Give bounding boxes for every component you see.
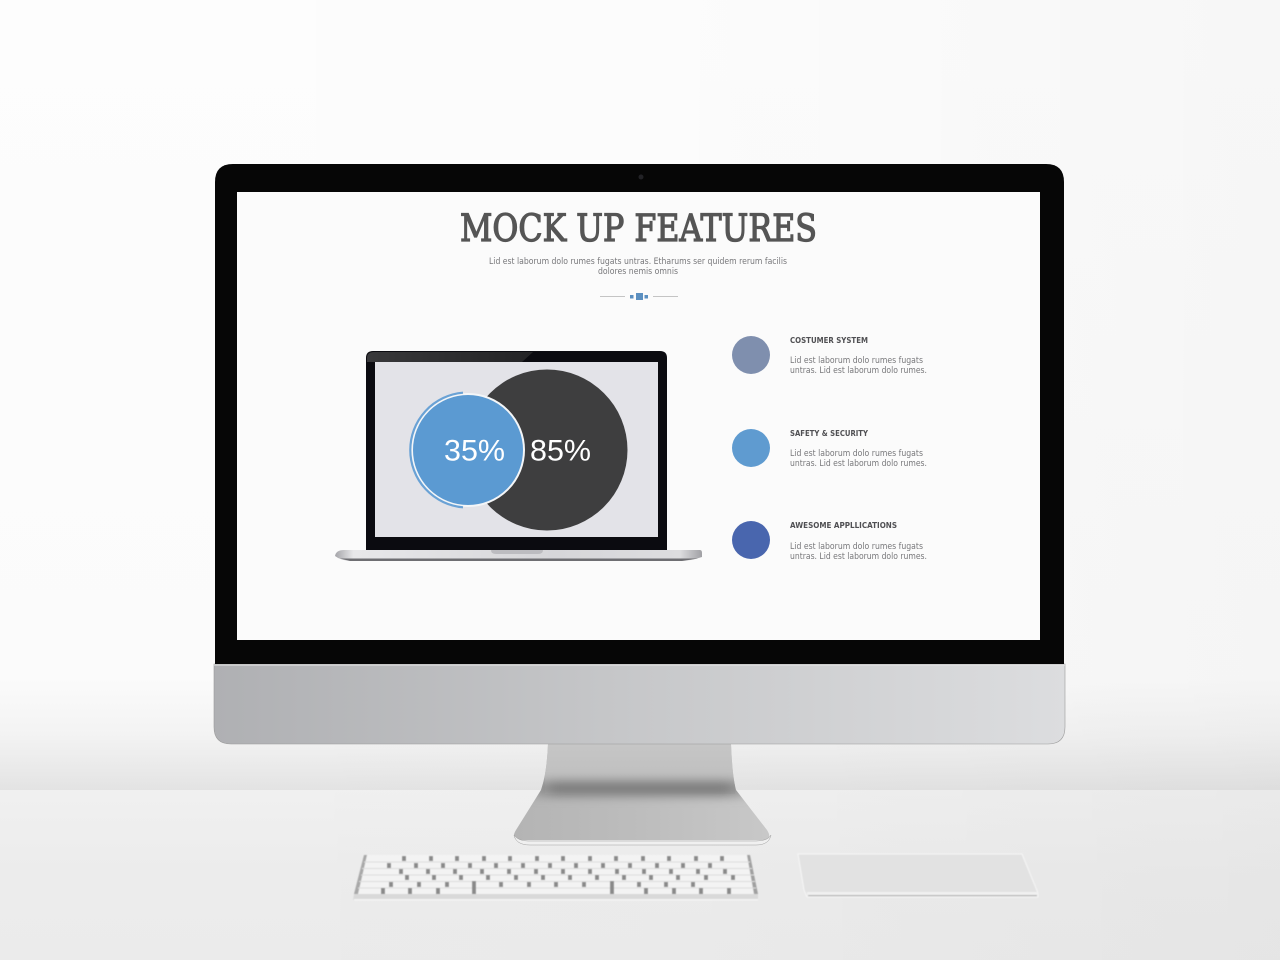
blue circle 35% [410,393,524,507]
monitor chin [214,664,1065,744]
laptop lid [366,351,667,550]
heading: AWESOME APPLLICATIONS [790,521,897,530]
feature: safety and security [732,429,927,469]
subtitle: dolores nemis omnis [598,267,678,277]
body text: untras. Lid est laborum dolo rumes. [790,459,927,469]
monitor body [214,164,1065,744]
icon circle [732,521,770,559]
body text [790,356,927,376]
heading: COSTUMER SYSTEM [790,336,868,345]
body text: Lid est laborum dolo rumes fugats [790,356,923,366]
body text: untras. Lid est laborum dolo rumes. [790,366,927,376]
subtitle [489,257,787,277]
feature: awesome applications [732,521,927,562]
monitor screen [237,192,1040,640]
divider ornament [600,293,678,300]
title: MOCK UP FEATURES [460,207,817,250]
laptop with overlapping percentage circles [335,351,702,561]
monitor stand [514,744,771,845]
icon circle [732,429,770,467]
laptop base [335,550,702,561]
dark circle 85% [466,370,628,530]
subtitle: Lid est laborum dolo rumes fugats untras. Etharums ser quidem rerum facilis [489,257,787,267]
feature: costumer system [732,336,927,376]
monitor bezel [215,164,1064,664]
body text: Lid est laborum dolo rumes fugats [790,542,923,552]
keyboard [353,855,758,900]
laptop screen [375,362,658,537]
body text: untras. Lid est laborum dolo rumes. [790,552,927,562]
dark circle 85%: 85% [530,434,591,468]
webcam [638,174,644,180]
blue circle 35%: 35% [444,434,505,468]
trackpad [798,854,1038,898]
icon circle [732,336,770,374]
heading: SAFETY & SECURITY [790,429,868,438]
body text: Lid est laborum dolo rumes fugats [790,449,923,459]
body text [790,542,927,562]
body text [790,449,927,469]
